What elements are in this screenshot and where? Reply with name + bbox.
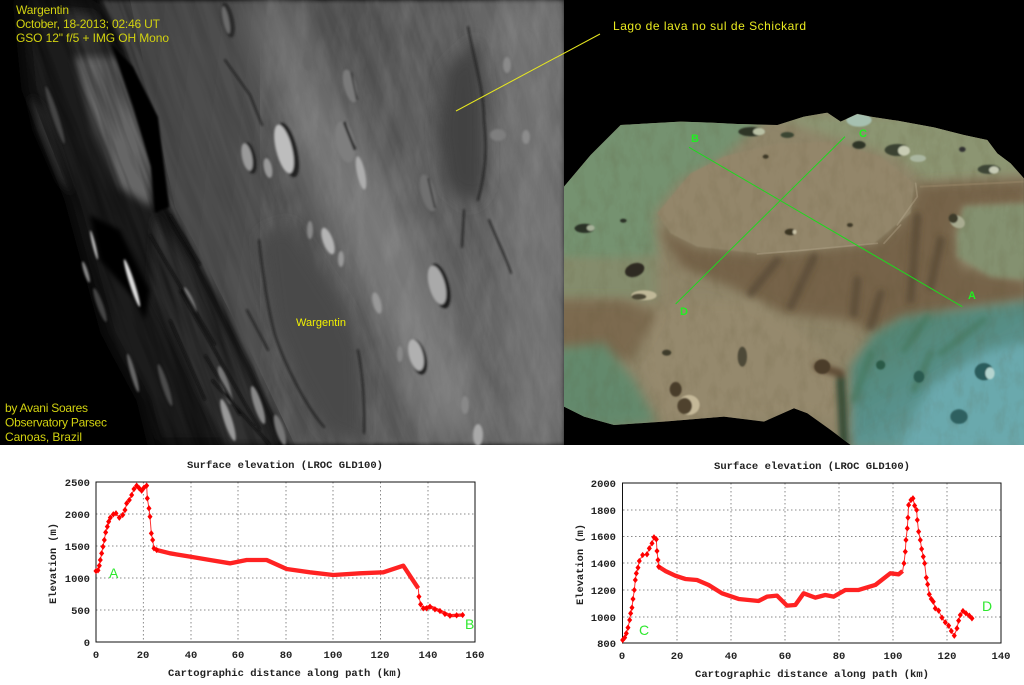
x axis ticks: [619, 651, 1010, 663]
left ridge: [564, 296, 658, 363]
bright limb glints: [43, 86, 289, 446]
x axis label: Cartographic distance along path (km): [168, 668, 402, 680]
y axis label: Elevation (m): [48, 523, 60, 604]
crater floor: [658, 156, 912, 254]
terrain model: [544, 100, 1024, 450]
chart title: Surface elevation (LROC GLD100): [714, 461, 910, 473]
x axis ticks: 80: [833, 651, 845, 663]
deep shadow: [111, 43, 169, 213]
dark lava lake patch: [438, 40, 486, 205]
y axis ticks: [65, 478, 90, 650]
y axis ticks: 1200: [591, 586, 616, 598]
chart title: Surface elevation (LROC GLD100): [187, 460, 383, 472]
annotation: lava lake: Lago de lava no sul de Schickard: [613, 19, 806, 33]
Wargentin dark floor: [262, 225, 362, 445]
lunar surface base: [100, 0, 564, 445]
y axis ticks: 1000: [65, 574, 90, 586]
caption: credits: by Avani Soares: [5, 401, 88, 415]
terrain texture: [582, 130, 1024, 445]
x axis ticks: 80: [280, 650, 292, 662]
point labels: B: [465, 616, 474, 632]
y axis ticks: 1000: [591, 613, 616, 625]
gridlines: [96, 482, 475, 642]
x axis ticks: 120: [938, 651, 956, 663]
x axis ticks: 100: [324, 650, 342, 662]
profile endpoint labels: C: [859, 128, 867, 140]
caption: observation details: GSO 12" f/5 + IMG OH Mono: [16, 31, 169, 45]
shadow slashes lower left: [150, 215, 270, 445]
terrain craters: [575, 113, 1000, 424]
y axis ticks: 2000: [65, 510, 90, 522]
x axis ticks: 140: [992, 651, 1010, 663]
panel: telescope photo of the lunar surface: [0, 0, 1012, 445]
profile lines: [676, 137, 962, 307]
label: Wargentin: Wargentin: [296, 317, 346, 329]
x axis ticks: 140: [419, 650, 437, 662]
profile endpoint labels: B: [691, 133, 699, 145]
plot frame: [622, 483, 1001, 643]
blue lowland: [851, 300, 1024, 450]
profile endpoint labels: [680, 128, 976, 318]
left lower green: [564, 341, 658, 425]
point labels: A: [109, 565, 119, 581]
y axis ticks: 1600: [591, 532, 616, 544]
left mid plain: [564, 258, 654, 296]
leader line to lava lake: [456, 34, 600, 111]
limb streak texture: [31, 0, 294, 445]
right basin floor: [957, 203, 1024, 280]
gridlines: [623, 483, 1001, 643]
crater floor rim highlight: [757, 182, 1024, 254]
elevation curve: [96, 486, 463, 616]
surface streak texture: [148, 2, 511, 444]
x axis ticks: 40: [725, 651, 737, 663]
profile endpoint labels: D: [680, 306, 688, 318]
x axis ticks: [93, 650, 484, 662]
bright highland band: [250, 0, 564, 445]
caption: credits: Observatory Parsec: [5, 416, 107, 430]
brown walls: [657, 180, 1024, 333]
chart: elevation profile C to D: [575, 461, 1010, 681]
profile endpoint labels: A: [968, 290, 976, 302]
y axis ticks: 1800: [591, 506, 616, 518]
x axis ticks: 60: [779, 651, 791, 663]
x axis ticks: 120: [371, 650, 389, 662]
y axis ticks: 500: [71, 606, 90, 618]
point labels: [109, 565, 474, 632]
x axis label: Cartographic distance along path (km): [695, 669, 929, 681]
y axis ticks: [591, 479, 616, 651]
point labels: C: [639, 622, 649, 638]
chart: elevation profile A to B: [48, 460, 484, 680]
rough limb zone: [20, 0, 288, 445]
y axis ticks: 1400: [591, 559, 616, 571]
x axis ticks: 160: [466, 650, 484, 662]
x axis ticks: 40: [185, 650, 197, 662]
x axis ticks: 20: [137, 650, 149, 662]
left mountain rim: [30, 10, 280, 445]
craters: [218, 1, 530, 446]
y axis ticks: 1500: [65, 542, 90, 554]
point labels: [639, 598, 992, 638]
x axis ticks: 20: [671, 651, 683, 663]
panel: 3D terrain render: [544, 0, 1024, 450]
lower plateau: [660, 408, 818, 422]
crater rims and scarps: [225, 27, 511, 433]
caption: observation details: October, 18-2013; 02:46 UT: [16, 17, 161, 31]
x axis ticks: 100: [884, 651, 902, 663]
x axis ticks: 60: [232, 650, 244, 662]
y axis label: Elevation (m): [575, 524, 587, 605]
elevation curve: [623, 498, 972, 640]
ridges and gullies: [751, 217, 984, 445]
y axis ticks: 2000: [591, 479, 616, 491]
point labels: D: [982, 598, 992, 614]
mottled highland texture: [260, 0, 564, 445]
y axis ticks: 2500: [65, 478, 90, 490]
x axis ticks: 0: [619, 651, 625, 663]
x axis ticks: 0: [93, 650, 99, 662]
caption: credits: Canoas, Brazil: [5, 430, 82, 444]
green plains: [564, 122, 763, 260]
plot frame: [96, 482, 475, 642]
y axis ticks: 0: [84, 638, 90, 650]
y axis ticks: 800: [597, 639, 616, 651]
caption: observation details: Wargentin: [16, 3, 69, 17]
